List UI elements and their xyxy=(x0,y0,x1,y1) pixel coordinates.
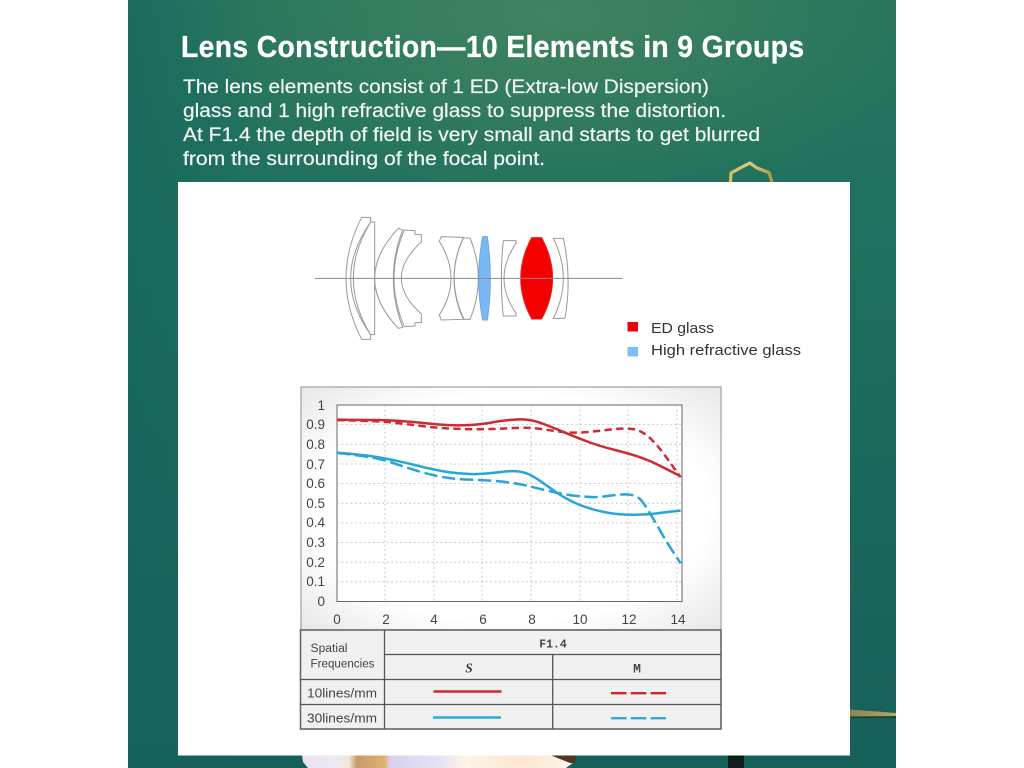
table column headers: M xyxy=(633,662,641,676)
table line samples xyxy=(433,692,666,718)
table column headers: F1.4 xyxy=(539,638,567,652)
decorative gold ornament behind panel xyxy=(730,163,772,182)
MTF chart xyxy=(301,387,721,630)
MTF curves xyxy=(337,419,681,563)
y axis labels: 0.5 xyxy=(306,496,325,511)
x axis labels: 2 xyxy=(382,612,390,627)
x axis labels: 0 xyxy=(333,612,341,627)
x axis labels: 8 xyxy=(528,612,536,627)
y axis labels: 0.4 xyxy=(306,515,325,530)
x axis labels xyxy=(333,612,686,627)
x axis labels: 10 xyxy=(572,612,588,627)
table column headers xyxy=(465,638,641,676)
y axis labels: 0.8 xyxy=(306,437,325,452)
x axis labels: 6 xyxy=(479,612,487,627)
y axis labels: 0.7 xyxy=(306,457,325,472)
y axis labels: 0.9 xyxy=(306,417,325,432)
legend table xyxy=(300,630,721,729)
y axis labels: 0.6 xyxy=(306,476,325,491)
lens construction diagram xyxy=(315,217,623,339)
description text: At F1.4 the depth of field is very small and starts to get blurred xyxy=(183,125,760,146)
title: Lens Construction—10 Elements in 9 Groups xyxy=(181,30,804,64)
table column headers: S xyxy=(465,660,473,676)
white panel xyxy=(178,182,850,756)
x axis labels: 12 xyxy=(621,612,637,627)
decorative gold stand arm xyxy=(850,710,896,718)
y axis labels xyxy=(306,398,325,609)
description text: from the surrounding of the focal point. xyxy=(183,149,545,170)
legend xyxy=(628,320,801,359)
y axis labels: 0.1 xyxy=(306,574,325,589)
table row headers: Frequencies xyxy=(310,658,375,670)
background: green backdrop xyxy=(128,0,896,768)
x axis labels: 4 xyxy=(430,612,438,627)
description text xyxy=(183,77,760,170)
y axis labels: 0 xyxy=(317,594,325,609)
description text: The lens elements consist of 1 ED (Extra-low Dispersion) xyxy=(183,77,709,98)
table row headers xyxy=(307,643,377,726)
photo fragment: person below panel xyxy=(302,755,577,768)
x axis labels: 14 xyxy=(670,612,686,627)
description text: glass and 1 high refractive glass to suppress the distortion. xyxy=(183,101,726,122)
table row headers: Spatial xyxy=(310,643,348,655)
y axis labels: 0.2 xyxy=(306,555,325,570)
table row headers: 30lines/mm xyxy=(307,710,377,726)
legend: High refractive glass xyxy=(651,342,801,359)
y axis labels: 1 xyxy=(317,398,325,413)
table row headers: 10lines/mm xyxy=(307,686,377,700)
photo fragment: black stand xyxy=(728,755,744,768)
legend: ED glass xyxy=(651,320,714,337)
y axis labels: 0.3 xyxy=(306,535,325,550)
